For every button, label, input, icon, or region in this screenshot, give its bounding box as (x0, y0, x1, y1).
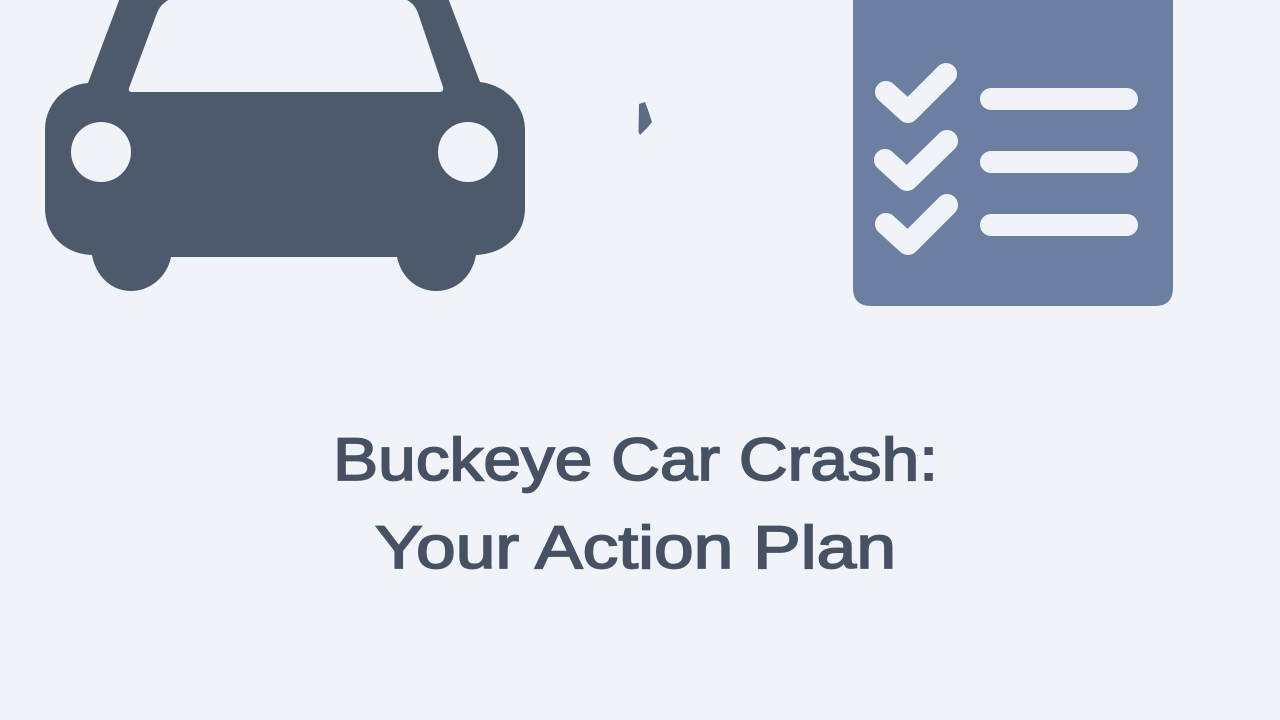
icon: small fragment (638, 102, 652, 135)
icon: checklist clipboard (853, 0, 1173, 306)
checklist item 1 (886, 74, 1138, 112)
title (333, 426, 938, 581)
checklist item 3 (886, 205, 1138, 244)
icon: car front view (45, 0, 525, 291)
title: Your Action Plan (375, 514, 896, 581)
checklist item 2 (885, 141, 1138, 180)
title: Buckeye Car Crash: (333, 426, 938, 493)
